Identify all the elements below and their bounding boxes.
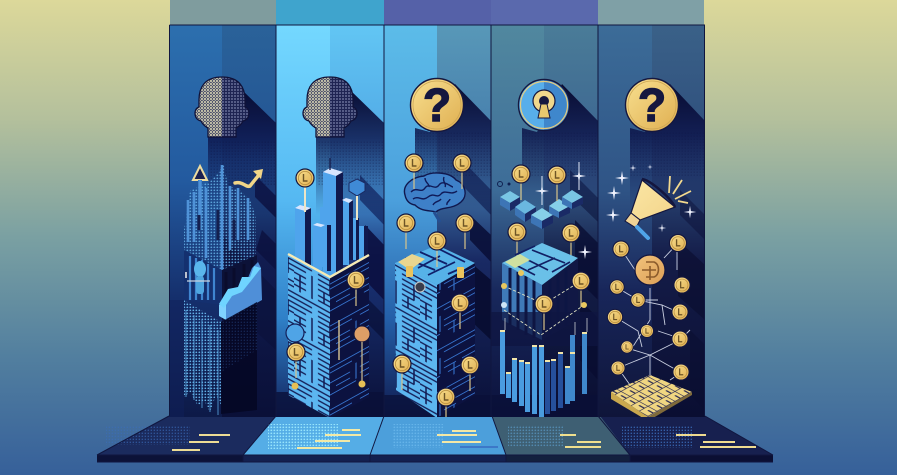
icon: head — [303, 77, 357, 137]
coin markers — [397, 154, 474, 249]
dashed links — [501, 270, 587, 335]
person figure — [186, 261, 210, 294]
circuit block — [288, 254, 369, 418]
data rain lower — [184, 300, 257, 415]
icon: question coin: ? — [638, 79, 666, 131]
icon: question coin — [410, 78, 464, 132]
staircase — [219, 262, 262, 320]
data rain upper — [184, 165, 257, 320]
icon: megaphone — [606, 164, 696, 238]
plate 3 — [370, 416, 506, 462]
building bars — [295, 158, 368, 277]
head shadow — [316, 88, 385, 215]
golden maze base — [611, 375, 692, 421]
icon: brain — [404, 173, 465, 222]
growth arrow — [235, 169, 263, 186]
circuit coins — [286, 271, 370, 390]
panel 2: head and circuit tower — [276, 25, 385, 418]
iso cubes — [498, 182, 583, 229]
top colour strip — [170, 0, 704, 25]
plate 5 — [600, 416, 773, 462]
network coins — [607, 234, 690, 380]
icon: pin sign — [193, 166, 207, 230]
circuit block — [395, 245, 475, 418]
icon: keyhole badge — [518, 80, 570, 130]
foreground coins — [535, 272, 590, 330]
panel 4: keyhole, cubes and bar chart — [491, 25, 599, 418]
plate 2 — [243, 416, 384, 462]
coin markers — [508, 165, 580, 259]
icon: question coin: ? — [423, 79, 451, 131]
icon: question coin — [626, 78, 678, 132]
circuit block top — [491, 243, 598, 346]
coin and shield markers — [296, 169, 365, 220]
head shadow — [208, 92, 276, 204]
sparkles — [535, 162, 592, 259]
icon: head — [195, 77, 249, 137]
panel outlines — [97, 25, 773, 462]
plate 1 — [97, 416, 276, 462]
panel 1: head and data rain — [169, 25, 277, 417]
panel 3: question, brain and circuit tower — [384, 25, 492, 423]
panel 5: question, megaphone and coin network — [598, 25, 706, 421]
floor: five label plates — [97, 416, 773, 462]
plate 4 — [492, 416, 630, 462]
bar chart — [500, 318, 587, 418]
network links — [622, 250, 690, 384]
coin shadow — [522, 84, 598, 200]
coin shadow — [630, 84, 704, 196]
block coins — [393, 232, 479, 423]
coin shadow — [415, 84, 490, 200]
